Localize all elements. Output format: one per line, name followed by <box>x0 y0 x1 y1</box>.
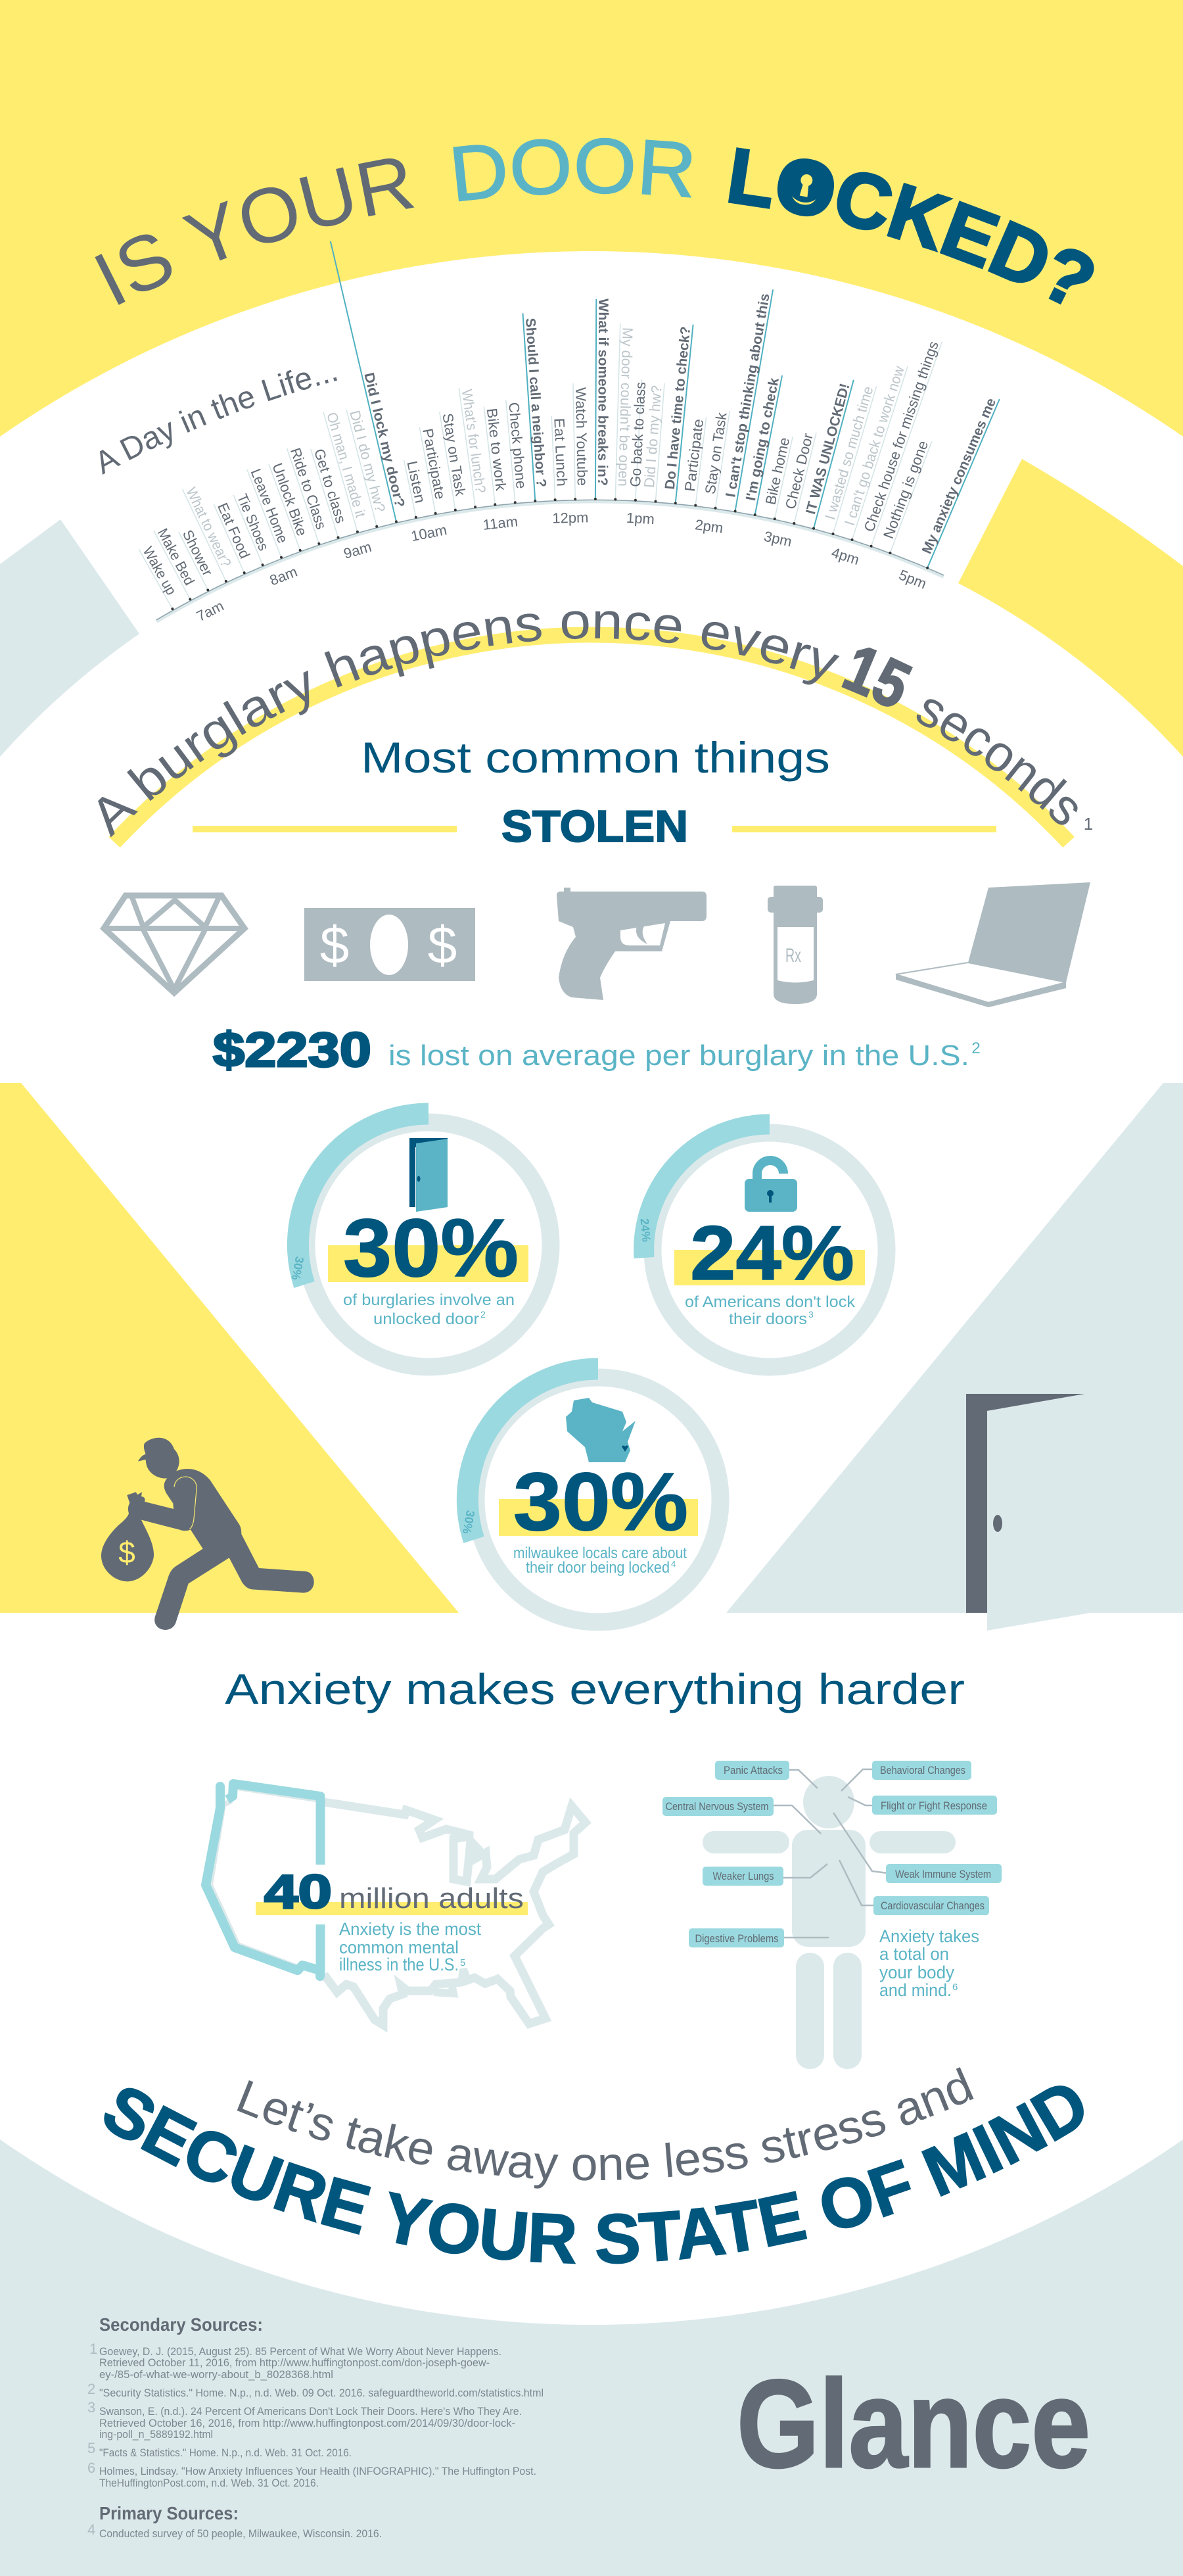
hour: 7am: 7am <box>194 598 226 625</box>
tick: Leave Home: Leave Home <box>248 466 291 545</box>
ring label: 30% <box>460 1510 477 1535</box>
caption line 2: their doors <box>729 1310 807 1328</box>
tick: Oh man, I made it: Oh man, I made it <box>323 410 369 519</box>
heading: anxiety makes everything harder: Anxiety makes everything harder <box>225 1665 965 1713</box>
stolen right rule <box>732 826 996 832</box>
heading: most common things: Most common things <box>361 733 830 782</box>
source 4 <box>87 2521 382 2540</box>
stat: 40 million adults <box>256 1866 528 1974</box>
source 5: "Facts & Statistics." Home. N.p., n.d. Web. 31 Oct. 2016. <box>99 2446 352 2459</box>
timeline axis <box>156 500 944 621</box>
title: door: DOOR <box>453 138 691 201</box>
footnote: 2 <box>480 1309 486 1320</box>
label: Behavioral Changes <box>872 1761 971 1780</box>
label: Panic Attacks <box>715 1761 789 1780</box>
hour: 5pm: 5pm <box>896 566 929 592</box>
caption line 2: unlocked door <box>373 1310 479 1328</box>
money left dollar: $ <box>320 916 349 974</box>
figure silhouette <box>703 1776 956 2069</box>
tick: Should I call a neighbor ?: Should I call a neighbor ? <box>522 318 549 488</box>
amount: $2230 <box>213 1022 371 1077</box>
wedge: right yellow shape <box>958 459 1183 757</box>
tick: Eat Food: Eat Food <box>214 500 253 561</box>
hour: 12pm: 12pm <box>552 509 589 527</box>
source 6: TheHuffingtonPost.com, n.d. Web. 31 Oct. 2016. <box>99 2477 319 2489</box>
logo: Glance: Glance <box>737 2354 1090 2494</box>
icon: laptop <box>896 882 1090 1007</box>
heading: stolen: STOLEN <box>501 801 688 851</box>
source 6 <box>87 2460 536 2489</box>
number: 30% <box>343 1203 519 1294</box>
tick: What to wear?: What to wear? <box>183 485 235 569</box>
sources: secondary <box>87 2314 544 2489</box>
caption line 1: of burglaries involve an <box>343 1291 515 1309</box>
tick: Bike home: Bike home <box>762 436 793 506</box>
icon: burglar with money bag <box>101 1438 314 1630</box>
tick: What if someone breaks in?: What if someone breaks in? <box>595 298 611 486</box>
icon: pill bottle <box>768 886 823 1004</box>
label: Central Nervous System <box>662 1797 774 1816</box>
caption: anxiety takes a toll <box>879 1926 979 2000</box>
ring label: 30% <box>289 1256 306 1281</box>
tick: Participate <box>418 425 452 515</box>
background: top yellow field <box>0 0 1183 526</box>
tick: Stay on Task: Stay on Task <box>439 412 469 498</box>
label: Cardiovascular Changes: Cardiovascular Changes <box>881 1899 985 1912</box>
tick: Participate (afternoon): Participate <box>682 418 707 492</box>
icon: open door <box>966 1394 1090 1631</box>
prescription mark: Rx <box>785 945 801 966</box>
secondary heading: Secondary Sources: <box>99 2314 263 2335</box>
amount caption: is lost on average per burglary in the U.S. <box>388 1039 969 1072</box>
source 2 <box>87 2381 544 2399</box>
title: is your: IS YOUR <box>95 158 414 305</box>
caption line 1: of Americans don't lock <box>685 1293 856 1311</box>
tick: Tie Shoes: Tie Shoes <box>234 491 272 553</box>
yellow arc band behind burglary line <box>114 634 1069 842</box>
tick: What's for lunch?: What's for lunch? <box>459 388 489 494</box>
background: bottom pale field <box>0 2038 1183 2576</box>
timeline: a day in the life <box>138 238 1001 625</box>
tick: Stay on Task (afternoon): Stay on Task <box>702 411 730 495</box>
tick: Listen <box>403 457 432 519</box>
source 1 <box>89 2341 501 2381</box>
icon: Wisconsin <box>566 1398 636 1462</box>
tick: Did I do my hw? (afternoon): Did I do my hw? <box>641 385 665 489</box>
caption: anxiety takes a toll: and mind. <box>879 1980 952 2000</box>
source 2: 2 <box>87 2381 95 2397</box>
footnote: 5 <box>460 1957 465 1968</box>
million adults: million adults <box>339 1882 524 1915</box>
hour: 4pm: 4pm <box>829 544 861 568</box>
hour: 3pm: 3pm <box>762 528 793 550</box>
tick: IT WAS UNLOCKED!: IT WAS UNLOCKED! <box>803 382 852 516</box>
primary heading: Primary Sources: <box>99 2503 239 2523</box>
source 4: 4 <box>87 2521 95 2538</box>
connector lines <box>774 1769 888 1938</box>
map: United States outline <box>206 1784 586 2025</box>
caption line 2: common mental <box>339 1938 459 1957</box>
label: Weaker Lungs: Weaker Lungs <box>712 1870 774 1882</box>
stolen left rule <box>193 826 457 832</box>
title: locked: LOCKED? <box>728 147 1094 305</box>
label: Central Nervous System: Central Nervous System <box>665 1800 769 1813</box>
title <box>95 138 1094 305</box>
tick: Shower: Shower <box>179 527 216 579</box>
label: Weak Immune System <box>886 1864 1002 1883</box>
tick: Shower <box>177 525 223 592</box>
tick: I wasted so much time: I wasted so much time <box>822 385 876 521</box>
number: 24% <box>690 1210 854 1296</box>
tick: Eat Lunch: Eat Lunch <box>551 417 570 487</box>
caption line 1: Anxiety is the most <box>339 1919 481 1939</box>
source 3: Retrieved October 16, 2016, from http://www.huffingtonpost.com/2014/09/30/door-lock- <box>99 2417 515 2429</box>
source 1: ey-/85-of-what-we-worry-about_b_8028368.html <box>99 2368 333 2381</box>
burglary text seconds: seconds <box>916 699 1078 825</box>
icon: door <box>409 1138 448 1212</box>
heading: a burglary happens once every 15 seconds <box>98 611 1093 838</box>
footnote 1: 1 <box>1084 814 1093 834</box>
source 1: Retrieved October 11, 2016, from http://www.huffingtonpost.com/don-joseph-goew- <box>99 2356 490 2369</box>
hour: 1pm: 1pm <box>626 510 655 527</box>
burglary text start: A burglary happens once every <box>98 611 840 838</box>
tick: Eat Food <box>212 498 259 575</box>
tick: Participate (afternoon) <box>680 416 708 507</box>
sources: primary <box>87 2503 382 2540</box>
tick: Bike to work: Bike to work <box>484 408 509 492</box>
stat: $2230 lost <box>213 1022 981 1077</box>
caption line 3: illness in the U.S. <box>339 1955 459 1974</box>
footnote: 3 <box>808 1309 814 1320</box>
tick: Did I lock my door?: Did I lock my door? <box>361 371 407 509</box>
heading: a day in the life: A Day in the Life... <box>100 370 337 475</box>
tick: I can't stop thinking about this: I can't stop thinking about this <box>723 293 773 498</box>
caption: anxiety takes a toll: a total on <box>879 1944 949 1964</box>
hour: 9am: 9am <box>342 538 373 562</box>
tick: My door couldn't be open: My door couldn't be open <box>615 327 636 487</box>
tick: Check Door: Check Door <box>782 431 816 511</box>
tick: Check phone: Check phone <box>505 402 530 489</box>
icon: money <box>304 908 475 981</box>
caption: anxiety takes a toll: Anxiety takes <box>879 1926 979 1946</box>
panel: stat 30% Milwaukee <box>460 1369 720 1622</box>
caption: anxiety takes a toll: 6 <box>952 1982 958 1993</box>
burglary number 15: 15 <box>841 647 913 707</box>
tick: I'm going to check: I'm going to check <box>743 376 782 502</box>
source 5 <box>87 2440 352 2459</box>
bag dollar sign: $ <box>118 1535 135 1569</box>
icon: handgun <box>557 888 707 1000</box>
tick: Did I do my hw?: Did I do my hw? <box>346 408 388 514</box>
tick: Check house for missing things: Check house for missing things <box>860 339 942 534</box>
tick: Watch Youtube: Watch Youtube <box>572 387 591 486</box>
panel: stat 24% Americans <box>638 1124 887 1367</box>
hour: 2pm: 2pm <box>694 516 724 537</box>
source 3: Swanson, E. (n.d.). 24 Percent Of Americans Don't Lock Their Doors. Here's Who They Are. <box>99 2405 522 2418</box>
hour: 10am: 10am <box>409 521 448 544</box>
source 3: ing-poll_n_5889192.html <box>99 2428 213 2441</box>
label: Weak Immune System: Weak Immune System <box>895 1868 991 1880</box>
tick: Listen: Listen <box>404 460 429 504</box>
hour: 11am: 11am <box>482 513 519 533</box>
label: Cardiovascular Changes <box>873 1896 989 1915</box>
wedge: left pale shape <box>0 519 139 757</box>
tick: I can't go back to work now: I can't go back to work now <box>841 364 908 527</box>
tick: Unlock Bike: Unlock Bike <box>269 461 310 538</box>
tick: Get to class: Get to class <box>311 447 349 525</box>
label: Panic Attacks: Panic Attacks <box>724 1764 783 1777</box>
label: Behavioral Changes: Behavioral Changes <box>880 1764 965 1777</box>
panel: stat 30% burglaries <box>289 1114 551 1367</box>
tick: Ride to Class: Ride to Class <box>287 446 330 531</box>
label: Digestive Problems: Digestive Problems <box>695 1932 778 1945</box>
closing line: let's take away one less stress and: Let’s take away one less stress and <box>237 2067 974 2189</box>
ring label: 24% <box>638 1218 653 1243</box>
tick: Did I lock my door? <box>329 238 411 523</box>
closing headline: secure your state of mind: SECURE YOUR STATE OF MIND <box>104 2086 1084 2264</box>
title: keyhole in the O <box>785 164 827 206</box>
panel: pale light beam <box>726 1083 1183 1613</box>
tick: Make Bed: Make Bed <box>154 525 198 588</box>
source 1: 1 <box>89 2341 97 2357</box>
money right dollar: $ <box>428 916 457 974</box>
map: western states highlight <box>206 1784 321 1976</box>
source 3: 3 <box>87 2399 95 2416</box>
footnote: 4 <box>671 1559 676 1569</box>
diagram: body figure <box>662 1761 1002 2069</box>
caption: anxiety takes a toll: your body <box>879 1963 954 1982</box>
tick: Go back to class: Go back to class <box>627 381 649 487</box>
icon: diamond <box>104 895 244 993</box>
source 4: Conducted survey of 50 people, Milwaukee, Wisconsin. 2016. <box>99 2527 382 2540</box>
number: 30% <box>513 1456 688 1548</box>
panel: yellow light beam <box>0 1083 459 1613</box>
number 40: 40 <box>264 1866 332 1919</box>
icon: padlock <box>745 1160 797 1212</box>
label: Digestive Problems <box>689 1928 784 1947</box>
footnote 2: 2 <box>971 1039 981 1057</box>
source 1: Goewey, D. J. (2015, August 25). 85 Percent of What We Worry About Never Happens. <box>99 2345 501 2358</box>
source 5: 5 <box>87 2440 95 2456</box>
tick: Do I have time to check?: Do I have time to check? <box>662 325 693 490</box>
tick: Participate: Participate <box>419 427 449 500</box>
source 3 <box>87 2399 522 2441</box>
source 2: "Security Statistics." Home. N.p., n.d. Web. 09 Oct. 2016. safeguardtheworld.com/statistics.html <box>99 2387 544 2399</box>
tick: My anxiety consumes me: My anxiety consumes me <box>919 396 999 556</box>
tick: Wake up: Wake up <box>140 544 180 598</box>
tick: Nothing is gone: Nothing is gone <box>880 439 931 541</box>
source 6: 6 <box>87 2460 95 2476</box>
label: Flight or Fight Response: Flight or Fight Response <box>881 1800 987 1812</box>
hour: 8am: 8am <box>267 563 300 588</box>
source 6: Holmes, Lindsay. "How Anxiety Influences Your Health (INFOGRAPHIC)." The Huffington Post. <box>99 2465 536 2477</box>
caption line 2: their door being locked <box>526 1559 670 1577</box>
label: Flight or Fight Response <box>872 1796 997 1815</box>
caption line 1: milwaukee locals care about <box>513 1544 687 1562</box>
label: Weaker Lungs <box>703 1867 783 1886</box>
